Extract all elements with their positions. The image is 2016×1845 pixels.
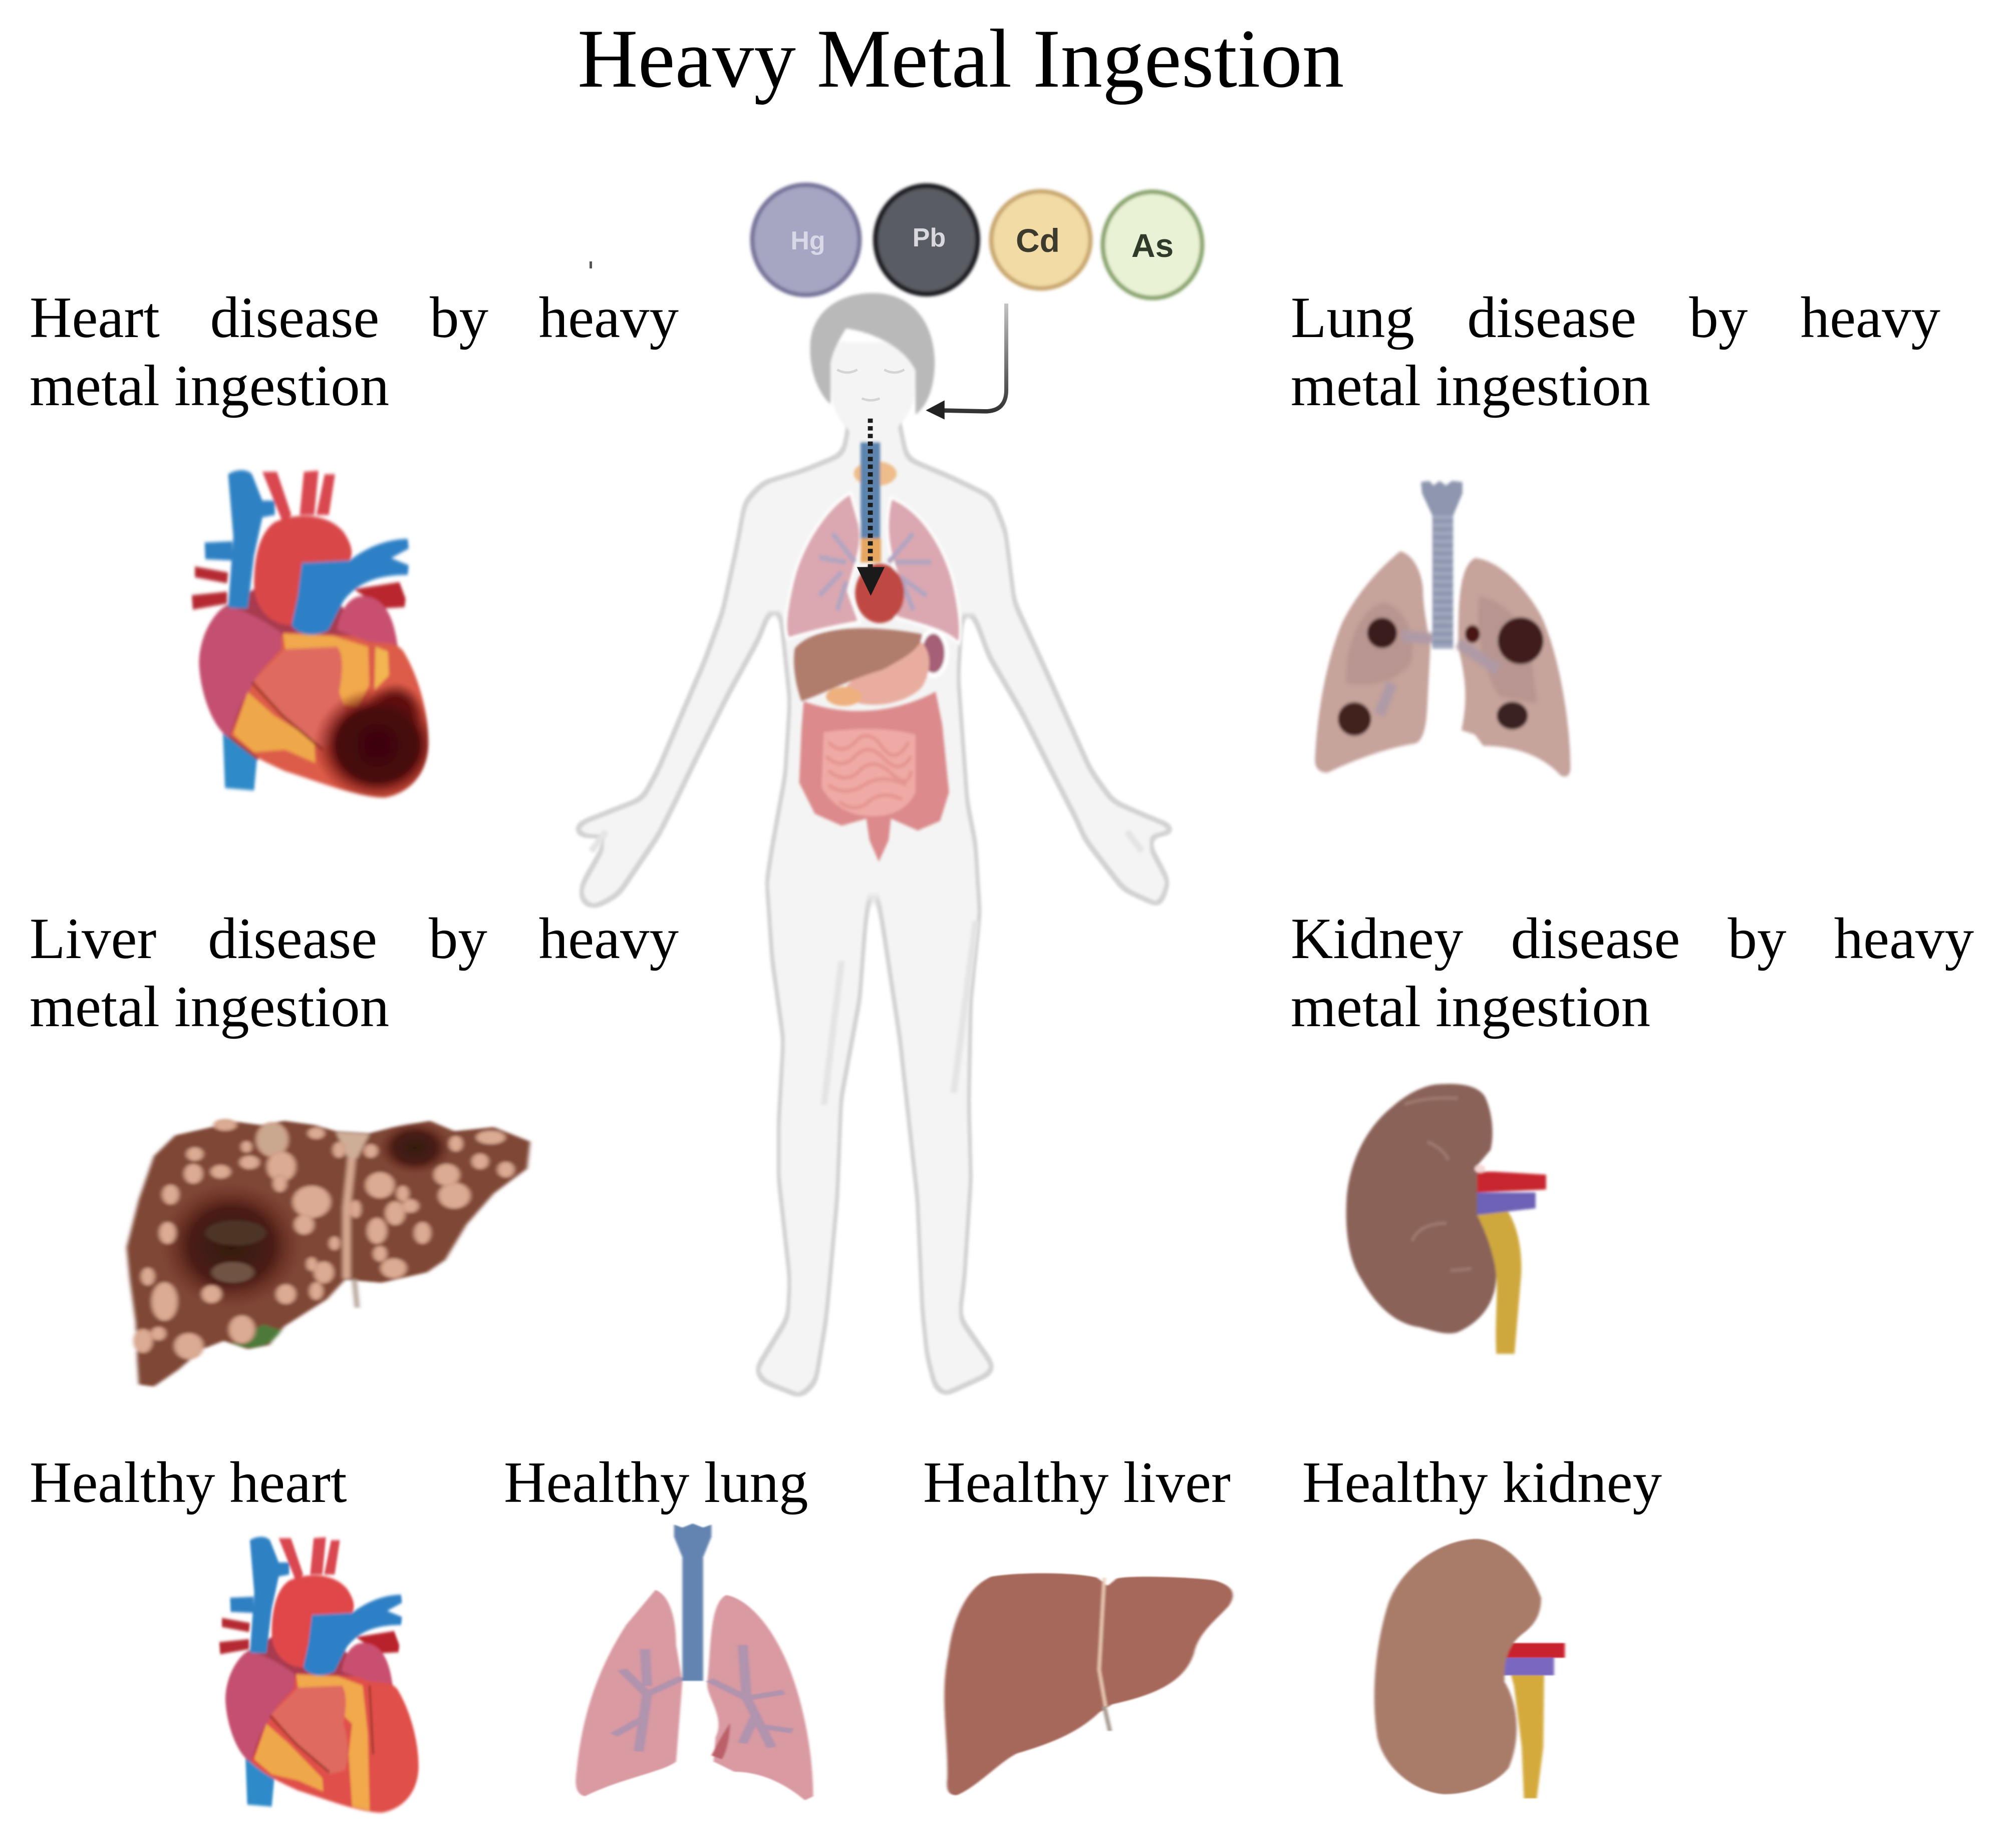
label: As: As xyxy=(1131,227,1174,264)
esophagus xyxy=(860,538,881,562)
icon: healthy liver xyxy=(944,1573,1233,1795)
tumours xyxy=(1367,618,1397,648)
trachea xyxy=(1421,481,1463,649)
text: liver disease label: metal ingestion xyxy=(30,975,389,1039)
text: lung disease label: metal ingestion xyxy=(1291,354,1650,418)
trachea xyxy=(860,443,880,557)
text: heart disease label xyxy=(30,285,679,418)
left lung xyxy=(575,1590,682,1796)
stray mark xyxy=(590,261,592,268)
figure: human body outline xyxy=(571,411,1176,1399)
title: Heavy Metal Ingestion xyxy=(578,13,1344,105)
text: healthy liver label: Healthy liver xyxy=(923,1450,1231,1515)
nodules xyxy=(135,1120,513,1359)
icon: diseased heart xyxy=(192,470,442,802)
icon: diseased liver xyxy=(127,1120,530,1387)
text: healthy heart label: Healthy heart xyxy=(30,1450,347,1515)
renal artery xyxy=(1502,1643,1565,1658)
spleen xyxy=(920,631,947,675)
internal organs xyxy=(786,443,961,862)
facial features xyxy=(837,370,904,400)
cardiac notch xyxy=(711,1723,730,1759)
small intestine xyxy=(821,729,916,816)
liver xyxy=(794,628,922,701)
bronchi xyxy=(819,533,931,610)
metal circle: mercury xyxy=(752,185,859,295)
metal circle: lead xyxy=(876,186,978,294)
right lung xyxy=(707,1595,813,1800)
pancreas xyxy=(826,687,862,706)
heart xyxy=(855,564,904,623)
renal vein xyxy=(1475,1192,1536,1215)
kidney body xyxy=(1346,1084,1496,1333)
shaded bronchial areas xyxy=(1346,596,1537,715)
text: kidney disease label xyxy=(1291,906,1974,1039)
kidney body xyxy=(1374,1539,1541,1794)
text: lung disease label: Lung disease by heavy xyxy=(1291,285,1940,350)
metal circle: arsenic xyxy=(1103,192,1202,298)
label: Cd: Cd xyxy=(1016,222,1060,259)
bronchi xyxy=(614,1645,792,1751)
falciform ligament xyxy=(347,1135,354,1279)
right lung xyxy=(1459,558,1570,777)
hair xyxy=(810,293,935,415)
gallbladder xyxy=(233,1324,281,1348)
ureter xyxy=(1511,1675,1544,1798)
text: liver disease label xyxy=(30,906,679,1039)
label: Pb: Pb xyxy=(913,223,946,252)
illustration: head, neck and internal organs xyxy=(786,293,1006,862)
stomach xyxy=(841,639,929,705)
arrow: exposure pointing to mouth xyxy=(926,303,1006,420)
icon: healthy lungs xyxy=(575,1523,813,1800)
face xyxy=(830,342,916,439)
renal vein xyxy=(1500,1658,1554,1675)
left lung xyxy=(1315,551,1430,773)
metal circle: cadmium xyxy=(991,191,1090,288)
icon: diseased kidney xyxy=(1346,1084,1546,1354)
left lung xyxy=(786,493,861,639)
text: heart disease label: metal ingestion xyxy=(30,354,389,418)
label: Hg: Hg xyxy=(790,226,825,255)
icon: healthy heart xyxy=(219,1537,419,1812)
text: kidney disease label: metal ingestion xyxy=(1291,975,1650,1039)
colon xyxy=(799,692,949,862)
text: lung disease label xyxy=(1291,285,1940,418)
renal artery xyxy=(1475,1172,1546,1192)
ureter xyxy=(1477,1211,1521,1354)
trachea xyxy=(674,1523,711,1681)
right lung xyxy=(887,498,961,644)
text: kidney disease label: Kidney disease by heavy xyxy=(1291,906,1974,971)
arrow: swallowed path down the throat xyxy=(857,419,885,596)
text: heart disease label: Heart disease by heavy xyxy=(30,285,679,350)
icon: diseased lungs xyxy=(1315,481,1570,777)
text: healthy lung label: Healthy lung xyxy=(504,1450,808,1515)
ligament xyxy=(1099,1578,1105,1706)
thyroid xyxy=(854,461,897,486)
text: liver disease label: Liver disease by heavy xyxy=(30,906,679,971)
icon: healthy kidney xyxy=(1374,1539,1565,1798)
text: healthy kidney label: Healthy kidney xyxy=(1302,1450,1662,1515)
